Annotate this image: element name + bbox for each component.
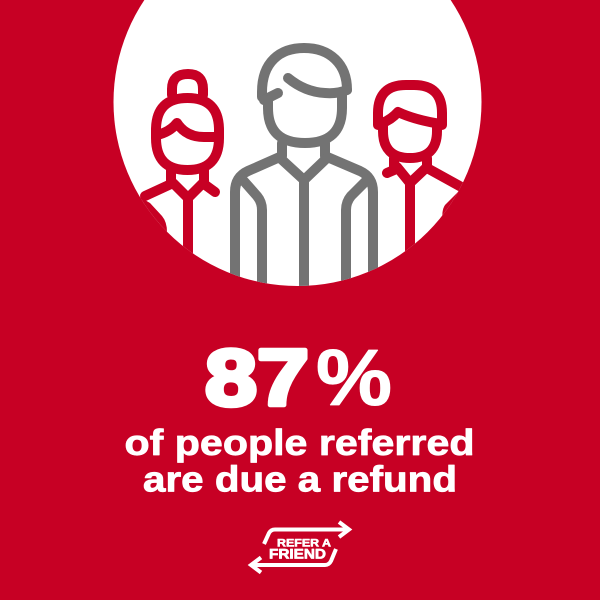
headline statistic: 87 [205, 333, 309, 422]
icon: top arrow [264, 522, 349, 544]
icon: woman [130, 74, 219, 260]
icon: bottom arrow [251, 549, 336, 572]
subheading text [124, 422, 474, 500]
white circle panel with people [114, 0, 482, 290]
icon: man on the right [378, 85, 470, 260]
subheading text: are due a refund [143, 458, 457, 500]
logo wordmark: REFER A [277, 538, 331, 550]
logo wordmark: FRIEND [269, 546, 326, 562]
infographic canvas [114, 0, 482, 574]
logo: refer a friend [251, 522, 349, 572]
subheading text: of people referred [124, 422, 474, 463]
icon: central man in grey [235, 48, 373, 290]
logo wordmark [269, 538, 331, 562]
headline statistic [205, 333, 392, 422]
headline statistic: % [316, 333, 392, 422]
